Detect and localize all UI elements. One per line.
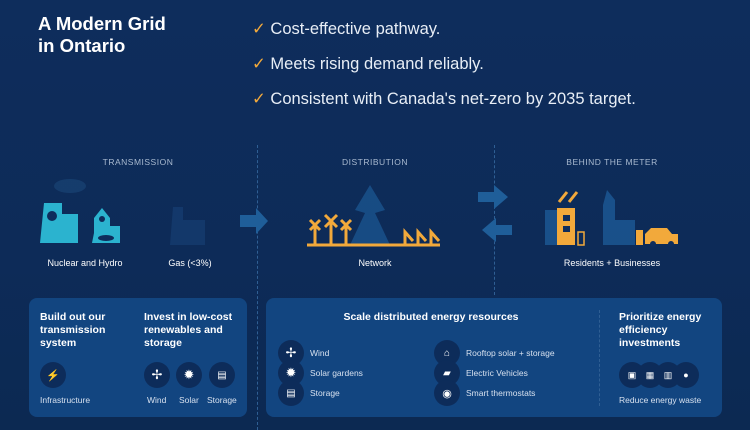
list: right bbox=[434, 340, 555, 406]
icon row: wind solar storage bbox=[144, 362, 237, 405]
list: left: ✹ bbox=[286, 365, 296, 380]
list: left: Solar gardens bbox=[310, 368, 363, 378]
label: infrastructure: Infrastructure bbox=[40, 395, 90, 405]
icon row: wind solar storage: ▤ bbox=[217, 370, 227, 380]
heading: invest: Invest in low-cost bbox=[144, 311, 232, 323]
title: in Ontario bbox=[38, 35, 125, 56]
icon row: wind solar storage: Wind bbox=[147, 395, 166, 405]
icon row: wind solar storage: ✢ bbox=[152, 367, 162, 382]
title bbox=[38, 13, 166, 56]
heading: build out: system bbox=[40, 337, 76, 349]
icon: infrastructure: ⚡ bbox=[46, 370, 60, 382]
label: nuclear and hydro: Nuclear and Hydro bbox=[47, 258, 123, 268]
icon: residents and businesses bbox=[545, 190, 678, 246]
heading: build out: Build out our bbox=[40, 311, 105, 323]
checklist: ✓ Cost-effective pathway. bbox=[252, 20, 440, 38]
list: right: ▰ bbox=[443, 368, 451, 378]
list: left: Storage bbox=[310, 388, 340, 398]
icon: network bbox=[307, 185, 440, 246]
list: right: ⌂ bbox=[444, 348, 450, 358]
icon row: efficiency: ▣ bbox=[628, 370, 636, 380]
heading: scale DER: Scale distributed energy resources bbox=[343, 311, 519, 323]
heading: invest: storage bbox=[144, 337, 182, 349]
label: residents + businesses: Residents + Businesses bbox=[564, 258, 660, 268]
heading: invest bbox=[144, 311, 232, 349]
list: left: ✢ bbox=[286, 345, 296, 360]
list: right: Smart thermostats bbox=[466, 388, 535, 398]
checklist: ✓ Consistent with Canada's net-zero by 2035 target. bbox=[252, 90, 636, 108]
list: left: Wind bbox=[310, 348, 329, 358]
icon: gas bbox=[170, 207, 205, 245]
list: right: ◉ bbox=[442, 388, 452, 400]
heading: distribution: DISTRIBUTION bbox=[342, 157, 408, 167]
title: A Modern Grid bbox=[38, 13, 166, 34]
icon row: efficiency: ▦ bbox=[646, 370, 654, 380]
heading: build out: transmission bbox=[40, 324, 105, 336]
checklist: ✓ Meets rising demand reliably. bbox=[252, 55, 484, 73]
icon row: efficiency: ▥ bbox=[664, 370, 672, 380]
heading: efficiency bbox=[619, 311, 702, 349]
heading: build out bbox=[40, 311, 106, 349]
icon row: wind solar storage: Solar bbox=[179, 395, 199, 405]
icon: infrastructure bbox=[40, 362, 66, 388]
list: left bbox=[278, 340, 363, 406]
heading: efficiency: efficiency bbox=[619, 324, 667, 336]
list: left: ▤ bbox=[286, 388, 296, 398]
list: right: Electric Vehicles bbox=[466, 368, 528, 378]
heading: invest: renewables and bbox=[144, 324, 223, 336]
label: reduce waste: Reduce energy waste bbox=[619, 395, 701, 405]
heading: efficiency: investments bbox=[619, 337, 680, 349]
panel: transmission actions bbox=[29, 298, 247, 417]
heading: transmission: TRANSMISSION bbox=[103, 157, 173, 167]
icon row: efficiency bbox=[619, 362, 699, 388]
heading: efficiency: Prioritize energy bbox=[619, 311, 701, 323]
label: network: Network bbox=[358, 258, 392, 268]
panel: distribution actions bbox=[266, 298, 722, 417]
icon: nuclear and hydro bbox=[40, 179, 120, 243]
list: right: Rooftop solar + storage bbox=[466, 348, 555, 358]
label: gas: Gas (<3%) bbox=[168, 258, 212, 268]
icon row: wind solar storage: ✹ bbox=[184, 367, 194, 382]
icon row: wind solar storage: Storage bbox=[207, 395, 237, 405]
heading: behind the meter: BEHIND THE METER bbox=[566, 157, 658, 167]
arrows: two-way bbox=[478, 185, 512, 242]
arrow: to distribution bbox=[240, 208, 268, 234]
icon row: efficiency: ● bbox=[683, 370, 689, 380]
checklist bbox=[252, 20, 636, 108]
